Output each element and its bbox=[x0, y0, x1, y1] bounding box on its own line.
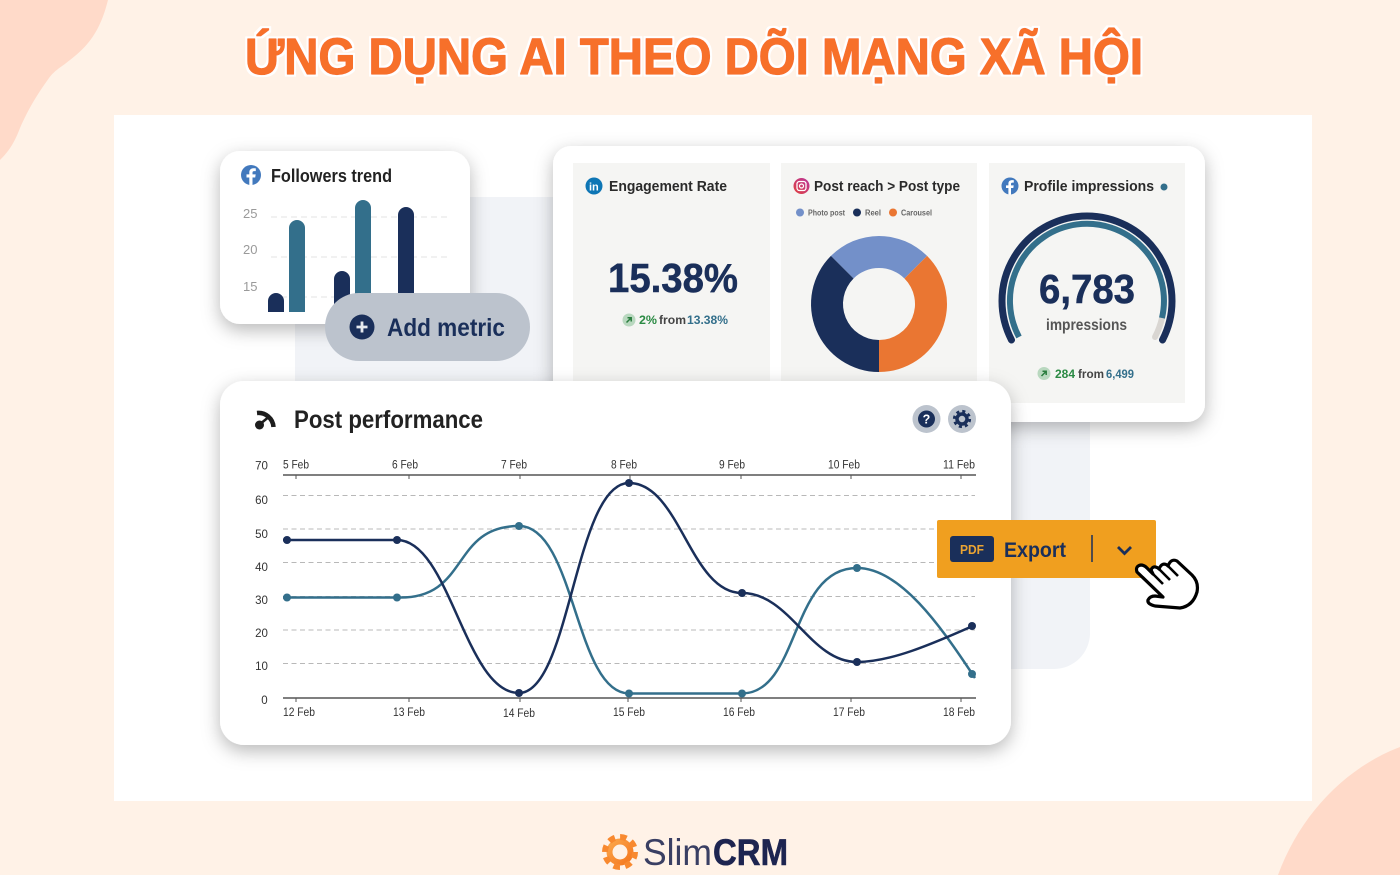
button: export bbox=[937, 520, 1156, 578]
legend: Reel bbox=[865, 208, 881, 218]
change: engagement rate: 13.38% bbox=[687, 313, 728, 327]
bottom date labels: 17 Feb bbox=[833, 707, 865, 719]
change: impressions bbox=[1038, 367, 1134, 381]
y axis labels bbox=[255, 460, 268, 707]
bottom date labels: 14 Feb bbox=[503, 708, 535, 720]
badge: pdf: PDF bbox=[960, 542, 984, 557]
logo: SlimCRM bbox=[605, 832, 788, 873]
change: engagement rate: 2% bbox=[639, 313, 657, 327]
top date labels: 7 Feb bbox=[501, 460, 527, 472]
y axis labels: 30 bbox=[255, 595, 268, 607]
series: navy bbox=[283, 479, 976, 697]
axis labels: 15 bbox=[243, 279, 257, 294]
bottom date labels: 16 Feb bbox=[723, 707, 755, 719]
top date labels: 10 Feb bbox=[828, 460, 860, 472]
icon: facebook bbox=[1002, 178, 1018, 194]
button: help bbox=[912, 405, 940, 433]
icon: plus bbox=[350, 314, 374, 340]
button: export: Export bbox=[1004, 539, 1066, 562]
panel: engagement rate bbox=[573, 163, 770, 403]
top date labels: 9 Feb bbox=[719, 460, 745, 472]
change: impressions: 284 bbox=[1055, 367, 1075, 381]
panel: followers trend bbox=[220, 151, 470, 324]
grey backdrop panel bbox=[295, 197, 1090, 669]
title: ỨNG DỤNG AI THEO DÕI MẠNG XÃ HỘI bbox=[245, 27, 1143, 85]
panel: post reach bbox=[781, 163, 977, 403]
label: impressions: impressions bbox=[1046, 317, 1127, 334]
top date labels bbox=[283, 460, 975, 472]
change: impressions: 6,499 bbox=[1106, 367, 1134, 381]
bottom date labels: 15 Feb bbox=[613, 707, 645, 719]
axis labels: 25 bbox=[243, 206, 257, 221]
white panel bbox=[114, 115, 1312, 801]
bottom date labels bbox=[283, 707, 975, 720]
panel: profile impressions bbox=[989, 163, 1185, 403]
bottom date labels: 12 Feb bbox=[283, 707, 315, 719]
series: teal bbox=[283, 522, 976, 698]
panel: post performance bbox=[220, 381, 1011, 745]
panel: metric cards bbox=[553, 146, 1205, 422]
top date labels: 5 Feb bbox=[283, 460, 309, 472]
icon: facebook bbox=[241, 165, 261, 185]
icon: instagram bbox=[794, 178, 810, 194]
icon: linkedin bbox=[586, 178, 602, 194]
button: add metric bbox=[325, 293, 530, 361]
badge: pdf bbox=[950, 536, 994, 562]
value: impressions: 6,783 bbox=[1039, 266, 1135, 312]
axis labels bbox=[243, 206, 257, 294]
bottom date labels: 13 Feb bbox=[393, 707, 425, 719]
heading: post performance: Post performance bbox=[294, 406, 483, 434]
heading: post reach: Post reach > Post type bbox=[814, 178, 960, 195]
button: help: ? bbox=[923, 412, 930, 426]
bar chart bbox=[268, 200, 414, 312]
heading: followers trend: Followers trend bbox=[271, 166, 392, 186]
axis labels: 20 bbox=[243, 242, 257, 257]
logo: SlimCRM: CRM bbox=[713, 832, 788, 873]
top date labels: 8 Feb bbox=[611, 460, 637, 472]
icon: linkedin: in bbox=[589, 182, 599, 194]
icon: gear bbox=[605, 837, 635, 867]
gauge bbox=[1002, 216, 1172, 340]
y axis labels: 20 bbox=[255, 628, 268, 640]
icon: gauge bbox=[255, 413, 274, 430]
icon: chevron bbox=[1118, 547, 1131, 554]
change: impressions: from bbox=[1078, 367, 1104, 381]
heading: profile impressions: Profile impressions bbox=[1024, 178, 1154, 195]
logo: SlimCRM: Slim bbox=[643, 832, 712, 873]
y axis labels: 70 bbox=[255, 460, 268, 472]
top date labels: 6 Feb bbox=[392, 460, 418, 472]
legend bbox=[796, 208, 932, 218]
change: engagement rate bbox=[622, 313, 728, 327]
y axis labels: 50 bbox=[255, 529, 268, 541]
bottom date labels: 18 Feb bbox=[943, 707, 975, 719]
button: add metric: Add metric bbox=[387, 314, 505, 342]
legend: Photo post bbox=[808, 208, 845, 218]
y axis labels: 40 bbox=[255, 562, 268, 574]
y axis labels: 60 bbox=[255, 495, 268, 507]
decorative blob bottom right bbox=[1278, 747, 1400, 875]
y axis labels: 10 bbox=[255, 661, 268, 673]
button: settings bbox=[948, 405, 976, 433]
value: engagement rate: 15.38% bbox=[608, 255, 738, 301]
y axis labels: 0 bbox=[261, 695, 268, 707]
decorative blob top left bbox=[0, 0, 108, 160]
change: engagement rate: from bbox=[659, 313, 686, 327]
top date labels: 11 Feb bbox=[943, 460, 975, 472]
legend: Carousel bbox=[901, 208, 932, 218]
line chart bbox=[255, 460, 976, 720]
heading: engagement rate: Engagement Rate bbox=[609, 178, 727, 195]
donut chart bbox=[811, 236, 947, 372]
icon: hand cursor bbox=[1136, 560, 1197, 608]
